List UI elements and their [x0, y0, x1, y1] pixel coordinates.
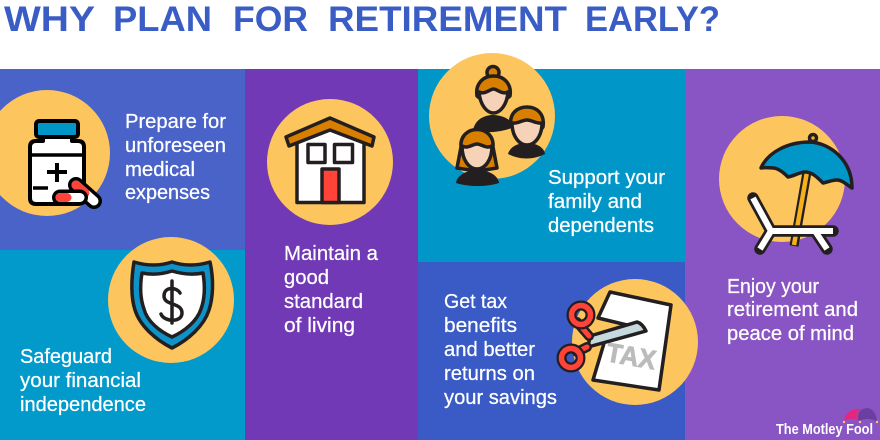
text: medical: Prepare for [125, 111, 226, 133]
icon: shield with dollar [108, 237, 234, 363]
text: retirement: peace of mind [727, 323, 854, 345]
title [4, 0, 720, 39]
text: tax: your savings [444, 387, 557, 409]
right boy [508, 107, 545, 158]
text: medical [125, 111, 226, 204]
panel: family background [418, 69, 685, 262]
text: independence [20, 346, 146, 416]
text: independence: Safeguard [20, 346, 112, 368]
text: standard of living: good [284, 267, 329, 289]
text: retirement: retirement and [727, 299, 858, 321]
title: PLAN [113, 0, 212, 39]
text: tax [444, 291, 557, 409]
text: retirement: Enjoy your [727, 276, 819, 298]
title: FOR [233, 0, 308, 39]
text: tax: and better [444, 339, 535, 361]
title: EARLY? [585, 0, 720, 39]
title: WHY [4, 0, 95, 39]
panel: retirement background [685, 69, 880, 440]
text: independence: independence [20, 394, 146, 416]
panel: standard of living background [245, 69, 418, 440]
text: medical: unforeseen [125, 135, 226, 157]
text: standard of living [284, 243, 379, 337]
text: family: dependents [548, 215, 654, 237]
text: standard of living: of living [284, 315, 355, 337]
icon: family [429, 53, 555, 186]
text: tax: benefits [444, 315, 517, 337]
icon: beach umbrella and lounge chair [719, 116, 852, 249]
text: standard of living: standard [284, 291, 363, 313]
top woman [473, 66, 514, 132]
text: medical: medical [125, 159, 195, 181]
text: tax: Get tax [444, 291, 507, 313]
text: family: family and [548, 191, 642, 213]
text: retirement [727, 276, 858, 345]
logo: The Motley Fool [776, 408, 878, 438]
text: family: Support your [548, 167, 665, 189]
text: family [548, 167, 665, 237]
panel: tax background [418, 262, 685, 440]
text: independence: your financial [20, 370, 141, 392]
icon: tax document and scissors: TAX [604, 337, 658, 376]
panel: independence background [0, 250, 245, 440]
panel: medical background [0, 69, 245, 250]
icon: house [267, 99, 393, 225]
title: RETIREMENT [328, 0, 567, 39]
text: medical: expenses [125, 182, 210, 204]
text: tax: returns on [444, 363, 535, 385]
icon: medicine bottle and pills [0, 90, 110, 216]
text: standard of living: Maintain a [284, 243, 379, 265]
icon: tax document and scissors [562, 279, 698, 405]
left woman [456, 130, 499, 186]
